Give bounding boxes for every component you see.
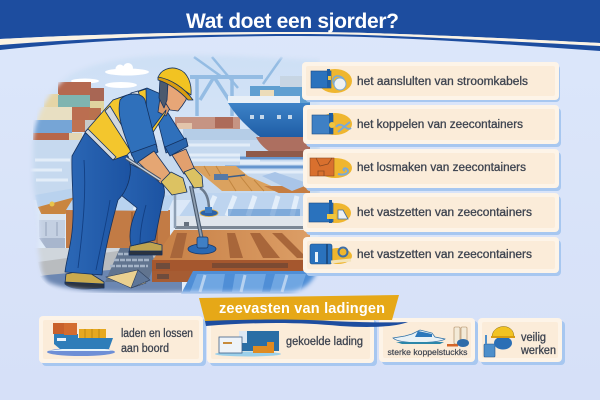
worker xyxy=(65,68,203,289)
worker: safety vest xyxy=(85,89,166,160)
label: werken xyxy=(520,345,556,357)
label: het koppelen van zeecontainers xyxy=(357,119,523,131)
harbour cranes xyxy=(190,57,282,116)
clouds xyxy=(71,63,149,88)
label: het aanslulten van stroomkabels xyxy=(357,76,528,88)
card: het vastzetten van zeecontainers xyxy=(303,193,561,235)
label: het vastzetten van zeecontainers xyxy=(357,249,532,261)
label: gekoelde lading xyxy=(286,336,363,348)
label: veilig xyxy=(521,332,546,344)
worker: head xyxy=(158,78,187,116)
ground xyxy=(30,248,182,293)
card: het losmaken van zeecontainers xyxy=(303,149,561,191)
container stacks xyxy=(33,82,104,140)
rear wooden deck xyxy=(192,166,310,196)
worker: back arm xyxy=(155,110,203,188)
label xyxy=(520,332,556,357)
label: het losmaken van zeecontainers xyxy=(357,162,526,174)
label: sterke koppelstuckks xyxy=(388,347,468,357)
icon: boat and couplers xyxy=(393,327,469,347)
wooden platform xyxy=(152,230,310,282)
card: sterke koppelstukken xyxy=(379,318,478,365)
lashing tool xyxy=(175,186,218,254)
panel: harbour scene with worker xyxy=(25,50,320,300)
container ship xyxy=(228,76,310,157)
card: veilig werken xyxy=(478,318,565,365)
card: gekoelde lading xyxy=(207,317,377,366)
worker: hard hat xyxy=(158,68,193,100)
worker: boots xyxy=(65,242,162,289)
worker: shirt xyxy=(112,88,160,128)
ribbon label: zeevasten van ladingen xyxy=(219,301,385,317)
left decks and orange crates xyxy=(35,188,175,250)
water xyxy=(25,140,320,200)
header banner xyxy=(0,0,600,51)
worker: front arm xyxy=(119,94,187,195)
label: aan boord xyxy=(121,343,169,355)
worker: trousers xyxy=(65,133,164,275)
card: het aansluiten van stroomkabels xyxy=(302,62,560,102)
label: het vastzetten van zeecontainers xyxy=(357,207,532,219)
icon: safety gear xyxy=(484,326,515,357)
title: Wat doet een sjorder? xyxy=(186,10,399,33)
card: laden en lossen aan boord xyxy=(39,316,206,366)
steel container xyxy=(175,193,310,230)
label: laden en lossen xyxy=(121,328,193,340)
icon: reefer containers xyxy=(215,331,281,356)
distant quay xyxy=(175,117,258,140)
grey toolbox xyxy=(39,214,65,248)
icon: lashing rod xyxy=(310,244,352,264)
blue container lid xyxy=(181,271,320,294)
card: het koppelen van zeecontainers xyxy=(303,105,561,147)
icon: securing container xyxy=(309,200,351,223)
icon: power cable xyxy=(311,69,352,93)
clipboard on deck xyxy=(106,270,150,288)
icon: cargo ship xyxy=(47,323,115,356)
ribbon: zeevasten van ladingen xyxy=(199,295,408,327)
icon: loose container xyxy=(310,158,352,178)
card: het vastzetten van zeecontainers (2) xyxy=(303,237,561,276)
label xyxy=(121,328,193,355)
icon: coupling xyxy=(312,113,352,135)
